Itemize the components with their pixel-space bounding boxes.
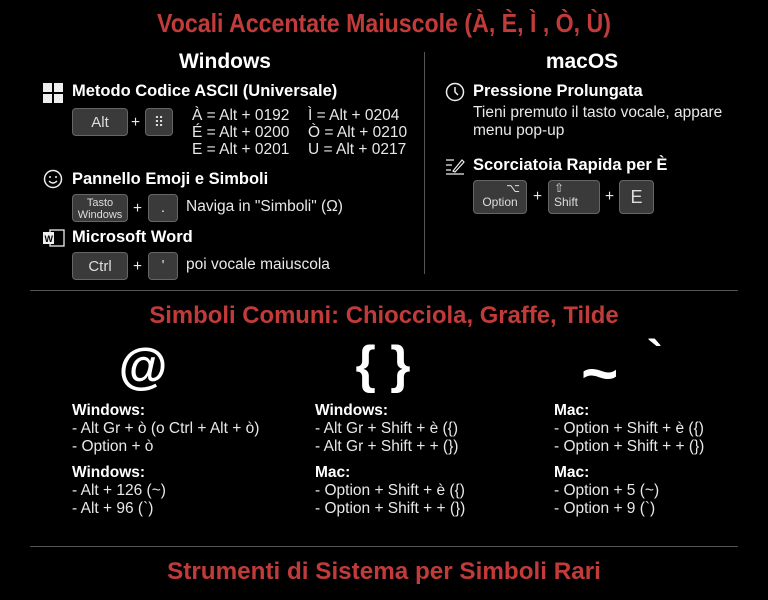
heading: word: Microsoft Word (72, 228, 193, 246)
column: braces: - Option + Shift + + (}) (315, 500, 465, 517)
panel: windows: + (131, 114, 140, 131)
column: braces (315, 402, 465, 517)
panel: windows: + (133, 258, 142, 275)
icon: braces: { } (356, 336, 410, 394)
heading: pressione: Pressione Prolungata (473, 82, 643, 100)
column: at: Windows: (72, 402, 145, 419)
key: numpad (145, 108, 173, 136)
icon: word (43, 229, 65, 247)
column: tilde (554, 402, 704, 517)
icon: pen (446, 159, 465, 175)
icon: smiley (44, 170, 62, 188)
column: braces: Mac: (315, 464, 350, 481)
column: tilde: Mac: (554, 464, 589, 481)
panel: windows: U = Alt + 0217 (308, 141, 406, 158)
panel: macOS: ⇧ (554, 181, 564, 195)
panel: windows: + (133, 200, 142, 217)
icon: windows logo (43, 83, 63, 103)
column: braces: - Alt Gr + Shift + + (}) (315, 438, 458, 455)
codes: É = Alt + 0200 (192, 124, 289, 141)
panel: windows: ' (162, 257, 164, 274)
panel: windows: Tasto (87, 197, 113, 209)
icon: tilde backtick: ` (647, 332, 663, 385)
column: at: - Alt Gr + ò (o Ctrl + Alt + ò) (72, 420, 259, 437)
column: at (72, 402, 259, 517)
icon: word: W (44, 234, 54, 244)
column: tilde: Mac: (554, 402, 589, 419)
column: at: Windows: (72, 464, 145, 481)
column: tilde: - Option + 5 (~) (554, 482, 659, 499)
panel: windows: . (161, 199, 165, 216)
icon: tilde backtick (581, 332, 663, 409)
panel: windows: Naviga in "Simboli" (Ω) (186, 198, 343, 215)
heading: ascii: Metodo Codice ASCII (Universale) (72, 82, 337, 100)
heading: scorciatoia: Scorciatoia Rapida per È (473, 156, 667, 174)
codes: À = Alt + 0192 (192, 107, 289, 124)
panel: macOS: ⌥ (506, 181, 520, 195)
panel: macOS: Tieni premuto il tasto vocale, appare (473, 104, 722, 121)
title: strumenti: Strumenti di Sistema per Simboli Rari (167, 558, 601, 585)
panel: macOS: + (533, 188, 542, 205)
key: alt: Alt (91, 114, 109, 131)
panel: macOS: Option (482, 195, 518, 209)
panel: windows: Ò = Alt + 0210 (308, 124, 407, 141)
codes: E = Alt + 0201 (192, 141, 289, 158)
panel: macOS: Shift (554, 195, 578, 209)
column: at: - Option + ò (72, 438, 153, 455)
heading: Windows: Windows (179, 50, 271, 73)
column: tilde: - Option + Shift + è ({) (554, 420, 704, 437)
panel: macOS: + (605, 188, 614, 205)
panel: windows: Windows (78, 209, 122, 221)
column: braces: Windows: (315, 402, 388, 419)
column: tilde: - Option + 9 (`) (554, 500, 655, 517)
title: simboli comuni: Simboli Comuni: Chiocciola, Graffe, Tilde (149, 302, 619, 329)
title: Vocali Accentate Maiuscole (À, È, Ì , Ò, Ù) (157, 8, 611, 38)
panel: windows (43, 82, 407, 280)
key: alt (72, 108, 128, 136)
panel: windows: Ctrl (88, 258, 112, 275)
heading: emoji: Pannello Emoji e Simboli (72, 170, 268, 188)
icon: at: @ (119, 338, 167, 394)
panel: macOS (446, 82, 722, 214)
panel: macOS: menu pop-up (473, 122, 564, 139)
panel: macOS: E (630, 187, 642, 207)
heading: macOS: macOS (546, 50, 618, 73)
column: at: - Alt + 96 (`) (72, 500, 153, 517)
panel: windows: poi vocale maiuscola (186, 256, 330, 273)
column: tilde: - Option + Shift + + (}) (554, 438, 704, 455)
column: braces: - Alt Gr + Shift + è ({) (315, 420, 458, 437)
codes (192, 106, 289, 158)
key: numpad: ⠿ (154, 114, 164, 130)
column: at: - Alt + 126 (~) (72, 482, 166, 499)
column: braces: - Option + Shift + è ({) (315, 482, 465, 499)
icon: clock (446, 82, 464, 102)
panel: windows: Ì = Alt + 0204 (308, 107, 399, 124)
icon: tilde backtick: ~ (581, 337, 618, 409)
